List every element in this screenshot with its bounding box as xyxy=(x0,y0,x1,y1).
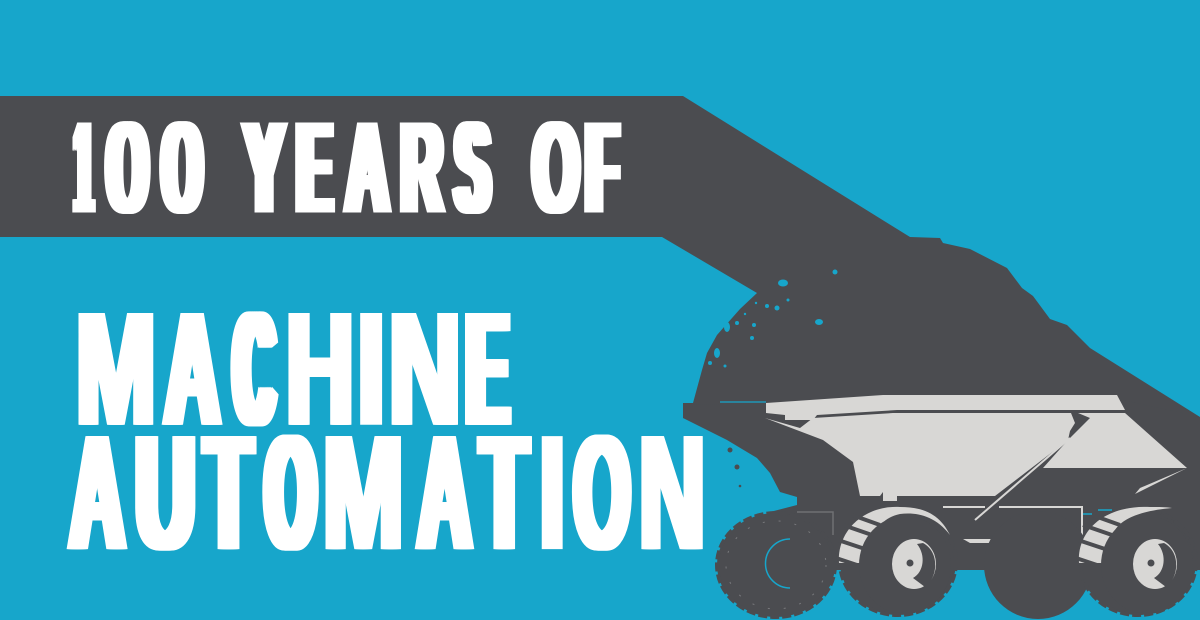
title line 2: N xyxy=(389,278,461,459)
dump bed left face xyxy=(765,413,1075,501)
title line 1: A xyxy=(346,95,389,241)
dump bed side panel xyxy=(1043,413,1187,468)
title line 3: T xyxy=(481,401,527,585)
middle tyre xyxy=(836,507,956,615)
ram and frame highlights xyxy=(943,438,1082,536)
title line 1: 1 xyxy=(76,95,91,241)
teal bed highlight xyxy=(720,401,766,403)
title line 3 xyxy=(66,401,705,585)
title line 1: F xyxy=(587,95,617,241)
title line 2: A xyxy=(165,278,220,459)
truck body xyxy=(683,395,1200,570)
title line 3: U xyxy=(136,401,195,585)
title line 3: N xyxy=(638,401,705,585)
title line 3: A xyxy=(418,401,471,585)
title line 1: E xyxy=(298,95,330,241)
title line 2: C xyxy=(235,278,274,459)
title line 1: 0 xyxy=(105,95,150,241)
falling debris xyxy=(728,448,741,487)
title line 3: M xyxy=(323,401,404,585)
right tyre xyxy=(1076,507,1196,615)
title line 1 xyxy=(72,95,622,241)
pile specks xyxy=(708,270,838,368)
title line 1: Y xyxy=(244,95,284,241)
rear tyre behind xyxy=(984,511,1092,619)
dark ribbon flowing into the load pile xyxy=(0,96,1200,430)
title line 3: O xyxy=(266,401,315,585)
teal chassis lines xyxy=(985,510,1112,571)
title line 3: T xyxy=(205,401,252,585)
title line 2: I xyxy=(350,278,392,459)
title line 1: S xyxy=(456,95,489,241)
title line 2: M xyxy=(76,278,156,459)
title line 3: A xyxy=(70,401,125,585)
title line 1: O xyxy=(533,95,579,241)
front tyre xyxy=(717,512,835,617)
title line 1: 0 xyxy=(160,95,204,241)
title line 2: H xyxy=(286,278,353,459)
title line 3: I xyxy=(532,401,572,585)
dump truck xyxy=(683,395,1200,619)
title line 3: O xyxy=(574,401,630,585)
title line 2 xyxy=(76,278,512,459)
title line 2: E xyxy=(467,278,508,459)
dump bed upper rim xyxy=(766,395,1125,420)
title line 1: R xyxy=(401,95,443,241)
